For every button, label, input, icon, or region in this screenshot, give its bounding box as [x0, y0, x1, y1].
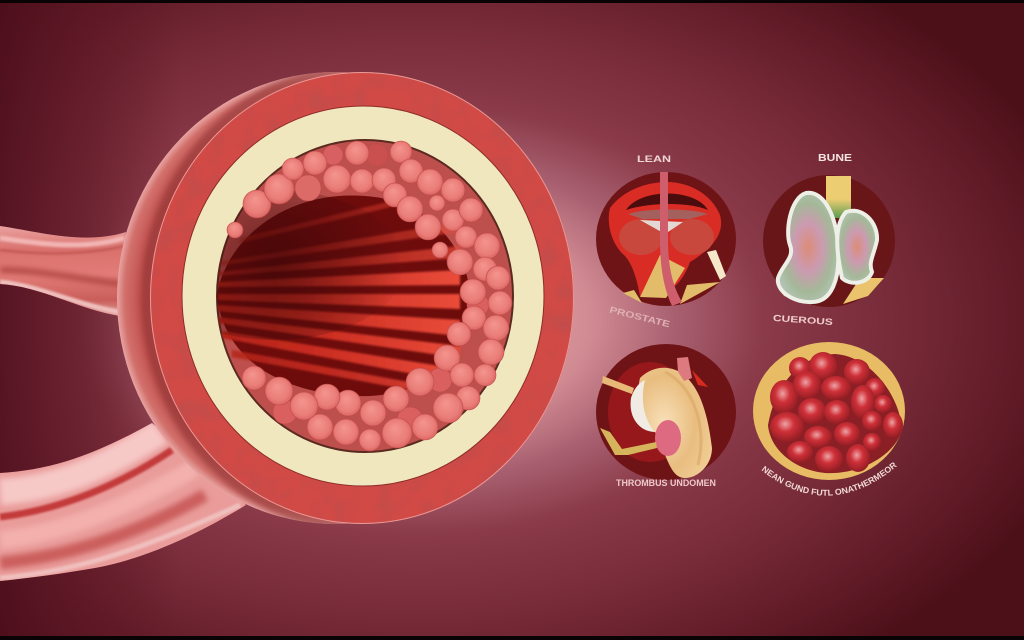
outer wall front — [150, 72, 575, 525]
red tissue — [609, 182, 721, 297]
left kidney lobe — [778, 193, 838, 302]
lumen with muscle stripes — [217, 190, 468, 396]
pink central stripe — [660, 172, 682, 306]
lower yellow strands — [600, 428, 657, 455]
panel: top-right organ — [763, 153, 895, 327]
panel: bottom-right organ — [753, 342, 905, 496]
berry cluster — [768, 352, 903, 473]
inner cavity — [217, 140, 513, 452]
yellow duct — [826, 176, 851, 218]
right kidney lobe — [837, 211, 877, 283]
panel: top-left organ — [596, 154, 736, 329]
label: top-left heading: LEAN — [637, 154, 671, 165]
pink oval — [655, 420, 681, 456]
tongue lobes — [619, 210, 714, 255]
swirl body — [638, 368, 712, 478]
outer wall side — [117, 72, 348, 524]
panel: bottom-left organ — [596, 344, 736, 488]
disc — [596, 344, 736, 480]
cream inner ring — [182, 106, 544, 486]
vessel cross-section — [117, 69, 577, 527]
lower tube — [0, 420, 250, 585]
yellow shards — [623, 255, 720, 304]
label: bottom-left caption: THROMBUS UNDOMEN — [616, 478, 716, 488]
disc — [763, 175, 895, 307]
label: bottom-right curved caption: NEAN GUND FUTL ONATHERMEOR — [762, 462, 897, 496]
duct — [602, 376, 634, 394]
disc — [753, 342, 905, 480]
upper tube — [0, 226, 126, 316]
label: top-left caption: PROSTATE — [608, 305, 671, 329]
red cell cluster — [227, 141, 512, 451]
dark cavity — [626, 194, 708, 210]
label: top-right caption: CUEROUS — [773, 313, 833, 327]
yellow base shards — [779, 278, 884, 304]
disc — [596, 172, 736, 306]
upper pink nub — [677, 357, 692, 381]
label: top-right heading: BUNE — [818, 153, 852, 164]
